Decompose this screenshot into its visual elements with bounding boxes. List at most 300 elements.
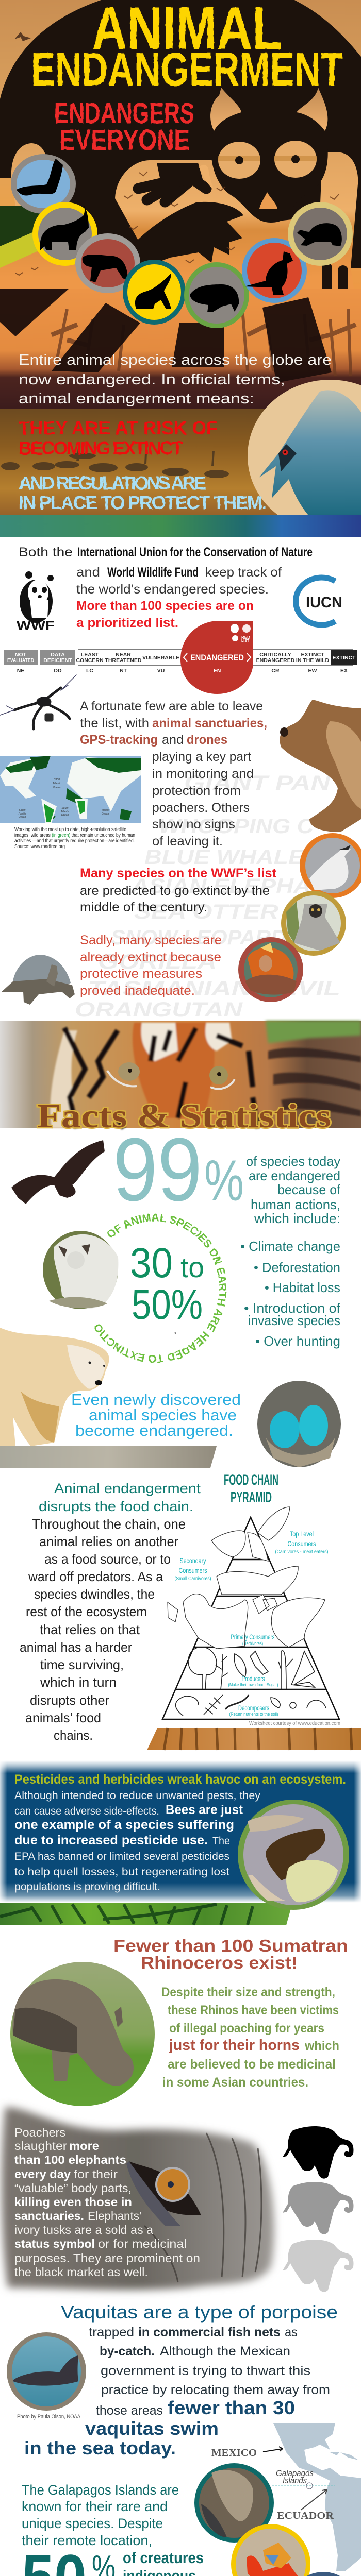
badge: rhino: [32, 202, 97, 266]
panel: statistics: x: [174, 1331, 176, 1335]
heading: food chain pyramid: [224, 1471, 278, 1506]
dark circle: [0, 0, 361, 268]
text: food chain body: [20, 1516, 186, 1743]
badge: boar: [184, 262, 249, 328]
label: Mexico: MEXICO: [211, 2447, 257, 2459]
pyramid labels: (Make their own food -Sugar): [228, 1682, 278, 1687]
swans: [1, 443, 229, 478]
photo: lemur badge: [281, 891, 346, 956]
panel: rhinoceros: [10, 1936, 348, 2106]
chart: red list scale: DD: [54, 668, 62, 674]
list: causes: invasive species: [248, 1313, 340, 1328]
map: wild areas: [0, 756, 141, 823]
panel: tree and water landscape: [0, 289, 361, 537]
arrow: to Mexico: [263, 2447, 283, 2452]
map: wild areas: Atlantic: [52, 782, 61, 785]
text: vaquitas body: Although the Mexican: [160, 2344, 290, 2359]
blue statement: AND REGULATIONS ARE: [19, 472, 206, 494]
text: fortunate few: drones: [187, 733, 227, 747]
text: food chain body: Throughout the chain, one: [32, 1516, 186, 1532]
chart: red list scale: ENDANGERED: [256, 657, 295, 664]
text: fortunate few: animal sanctuaries,: [152, 716, 267, 731]
text: elephant poaching: killing even those in: [14, 2195, 132, 2209]
text: galapagos intro: their remote location,: [22, 2533, 152, 2548]
text: sadly extinct: proved inadequate.: [80, 984, 195, 998]
circular label: OF ANIMAL SPECIES ON EARTH ARE HEADED TO EXTINCTION: [94, 1214, 227, 1363]
watermark species names: [75, 772, 345, 1021]
map caption: activities —and that urgently require protection—are identified.: [14, 838, 135, 844]
text: and WWF: World Wildlife Fund: [107, 565, 199, 580]
arrow: to Ecuador: [301, 2489, 327, 2510]
heading: food chain text: Animal endangerment: [54, 1481, 201, 1496]
text: vaquitas body: practice by relocating them away from: [101, 2383, 330, 2397]
heading: Vaquitas are a type of porpoise: [61, 2301, 338, 2323]
body text: Although intended to reduce unwanted pests, they: [14, 1790, 260, 1802]
text: and WWF: [76, 565, 282, 597]
pyramid labels: (Carnivores - meat eaters): [275, 1549, 328, 1555]
photo: tern badge: [300, 833, 361, 898]
chart: red list scale: EX: [340, 668, 348, 674]
watermark species names: ORANGUTAN: [75, 998, 243, 1021]
pyramid labels: (Small Carnivores): [174, 1576, 211, 1582]
text: galapagos intro: The Galapagos Islands are: [22, 2482, 179, 2498]
text: food chain body: species dwindles, the: [34, 1586, 155, 1602]
highlight: fewer than 30: fewer than 30: [168, 2397, 295, 2418]
text: newly discovered: become endangered.: [75, 1421, 233, 1439]
icon: WWF panda logo: WWF: [17, 619, 55, 633]
subtitle: [54, 97, 194, 157]
text: fortunate few: protection from: [152, 784, 241, 798]
eyes: [218, 142, 260, 179]
chart: red list scale: NE: [17, 668, 24, 674]
dark legs: [0, 289, 332, 383]
red highlight: [76, 599, 254, 630]
text: newly discovered: Even newly discovered: [71, 1391, 241, 1409]
text: and WWF: the world’s endangered species.: [76, 582, 269, 597]
fur strip: [0, 1446, 217, 1468]
stat: 30 to 50 percent: [130, 1240, 204, 1328]
text: elephant poaching: Elephants’: [88, 2209, 142, 2223]
head: [211, 111, 328, 223]
chart: red list scale: NT: [120, 668, 127, 674]
text: galapagos intro: [22, 2482, 179, 2548]
sunset band: [0, 289, 361, 410]
text: rhino description: [161, 1985, 339, 2090]
photo: arctic fox: [43, 1231, 118, 1309]
red statement: [19, 417, 218, 459]
map: wild areas: Ocean: [61, 814, 69, 817]
text: of creatures: [123, 2549, 213, 2576]
text: elephant poaching: [14, 2126, 200, 2279]
text: fortunate few: the list, with: [80, 716, 149, 731]
watermark species names: TASMANIAN DEVIL: [88, 977, 340, 1000]
feather strip: [0, 515, 361, 537]
text: human actions: [246, 1154, 341, 1226]
chart: red list scale: [4, 621, 357, 694]
pyramid frame: [162, 1517, 339, 1719]
photo credit: Photo by Paula Olson, NOAA: [17, 2414, 81, 2420]
badge: tiger: [75, 233, 140, 293]
text: rhino description: are believed to be medicinal: [168, 2057, 336, 2072]
pyramid labels: (Herbivores): [242, 1641, 263, 1646]
label: Galapagos Islands: Islands: [283, 2476, 307, 2485]
body text: can cause adverse side-effects.: [14, 1805, 159, 1817]
panel: pesticides: [0, 1760, 361, 1925]
text: human actions: because of: [277, 1182, 341, 1197]
text: vaquitas body: [89, 2325, 330, 2418]
text: food chain body: animals’ food: [25, 1710, 101, 1725]
chart: red list scale: THREATENED: [105, 657, 142, 664]
text: rhino description: just for their horns: [169, 2037, 300, 2054]
chart: red list scale: RED: [241, 635, 250, 640]
text: fortunate few: and: [162, 733, 184, 747]
photo: tamarin badge: [238, 937, 303, 1002]
map: Mexico and Ecuador: [211, 2423, 361, 2571]
red statement: BECOMING EXTINCT: [19, 437, 183, 459]
text: fortunate few: of leaving it.: [152, 834, 223, 849]
animal badges: [11, 154, 353, 328]
text: vaquitas body: as: [285, 2325, 298, 2340]
text: sadly extinct: already extinct because: [80, 950, 221, 964]
photo: vaquita badge: [7, 2332, 86, 2411]
chart: red list scale: EVALUATED: [7, 657, 34, 664]
intro text: Entire animal species across the globe are: [19, 352, 332, 368]
badge: kangaroo: [242, 238, 307, 303]
chart: red list scale: VU: [157, 668, 165, 674]
subtitle: EVERYONE: [59, 124, 190, 157]
body text: due to increased pesticide use.: [14, 1833, 208, 1848]
pyramid labels: Secondary: [179, 1556, 206, 1565]
intro text: [19, 352, 332, 407]
body text: EPA has banned or limited several pesticides: [14, 1851, 229, 1862]
body text: The: [212, 1835, 230, 1847]
icon: drone: [0, 675, 76, 729]
upper hand: [138, 178, 206, 202]
red highlight: a prioritized list.: [76, 616, 178, 630]
photo: bear: [280, 700, 361, 832]
text: galapagos intro: unique species. Despite: [22, 2516, 163, 2531]
heading: [113, 1936, 348, 1972]
text: and WWF: keep track of: [205, 565, 282, 580]
water: [0, 409, 361, 515]
text: newly discovered: [71, 1391, 241, 1439]
label: Galapagos Islands: [276, 2468, 314, 2485]
badge: wolf: [123, 260, 186, 325]
body text: Bees are just: [166, 1803, 243, 1817]
map: wild areas: North: [54, 778, 60, 781]
photo: elephant eye: [2, 2107, 274, 2290]
panel: galapagos: [22, 2463, 360, 2576]
watermark species names: BLUE WHALE: [144, 846, 305, 869]
text: food chain body: animal relies on another: [39, 1534, 178, 1549]
text: fortunate few: GPS-tracking: [80, 733, 158, 747]
stat: 99 percent: 99: [113, 1119, 202, 1219]
chart: red list scale: EN: [214, 668, 221, 674]
photo: vulture: [11, 1140, 105, 1204]
chart: red list scale: LIST: [241, 639, 250, 643]
text: WWF list: middle of the century.: [80, 900, 207, 914]
list: causes: • Over hunting: [255, 1333, 340, 1349]
text: sadly extinct: protective measures: [80, 967, 202, 981]
text: human actions: are endangered: [249, 1168, 340, 1183]
text: rhino description: of illegal poaching for years: [169, 2021, 324, 2036]
chart: red list scale: NEAR: [116, 652, 131, 658]
text: elephant poaching: ivory tusks are a sold as a: [14, 2223, 153, 2236]
text: human actions: which include:: [254, 1211, 340, 1226]
panel: who tracks species: [0, 545, 361, 1005]
lower hand and arm: [119, 202, 243, 273]
watermark species names: SNOW LEOPARD: [111, 926, 286, 949]
watermark species names: WHOOPING C: [159, 815, 314, 838]
text: vaquitas body: those areas: [96, 2403, 163, 2418]
text: fortunate few: playing a key part: [152, 750, 251, 764]
text: elephant poaching: slaughter: [14, 2139, 67, 2153]
sketches: producers: [188, 1647, 315, 1689]
watermark species names: GORILLA: [98, 951, 217, 973]
panel: statistics: [0, 1119, 341, 1468]
text: newly discovered: animal species have: [89, 1406, 237, 1424]
text: rhino description: Despite their size and strength,: [161, 1985, 335, 1999]
text: of creatures: of creatures: [123, 2549, 204, 2567]
map: wild areas: Indian: [102, 809, 109, 812]
body text: one example of a species suffering: [14, 1818, 234, 1832]
pyramid labels: (Return nutrients to the soil): [229, 1711, 278, 1717]
text: food chain body: as a food source, or to: [44, 1551, 171, 1567]
panel: hero header: [0, 0, 361, 335]
photo: polar bear: [0, 1328, 109, 1446]
text: WWF list: [80, 866, 277, 914]
map: wild areas: South: [19, 809, 26, 812]
chart: red list scale: EXTINCT: [301, 652, 324, 658]
highlight: fewer than 30: in the sea today.: [24, 2437, 176, 2459]
scale lines: [78, 650, 353, 665]
panel: vaquitas: [7, 2301, 361, 2571]
blue statement: [19, 472, 267, 513]
body text: [14, 1790, 260, 1893]
heading: food chain text: disrupts the food chain.: [39, 1499, 193, 1514]
text: elephant poaching: “valuable” body parts,: [14, 2181, 132, 2195]
text: vaquitas body: in commercial fish nets: [138, 2325, 281, 2340]
text: galapagos intro: known for their rare and: [22, 2499, 168, 2514]
text: food chain body: disrupts other: [30, 1692, 109, 1708]
photo: nest with eggs: [257, 1381, 341, 1467]
text: elephant poaching: or for medicinal: [98, 2237, 187, 2250]
photo: bee badge: [238, 1800, 349, 1910]
map: wild areas: Ocean: [53, 786, 61, 789]
badge: eagle: [11, 154, 76, 214]
photo: tiger face: [0, 1021, 361, 1128]
icon: IUCN logo: [296, 578, 342, 625]
body text: to help quell losses, but regenerating lost: [14, 1866, 229, 1878]
text: food chain body: animal has a harder: [20, 1639, 132, 1655]
stat: 30 to 50 percent: 50%: [132, 1281, 203, 1328]
chart: red list scale: VULNERABLE: [142, 655, 179, 661]
list: causes: • Climate change: [240, 1239, 340, 1254]
pyramid labels: Consumers: [178, 1566, 207, 1574]
text: sadly extinct: [80, 933, 222, 998]
pyramid labels: Consumers: [288, 1539, 316, 1548]
pyramid labels: Decomposers: [238, 1704, 269, 1712]
text: WWF list: are predicted to go extinct by the: [80, 884, 270, 898]
text: fortunate few: show no signs: [152, 817, 235, 832]
map caption: Source: www.roadfree.org: [14, 844, 65, 850]
photo: tortoise: [2, 955, 75, 1005]
pyramid labels: [174, 1530, 328, 1717]
text: elephant poaching: sanctuaries.: [14, 2209, 84, 2223]
circular label: [94, 1214, 227, 1363]
subtitle: ENDANGERS: [54, 97, 194, 130]
right arm fingers: [327, 268, 343, 315]
fern strip: [0, 1903, 292, 1925]
orange lower landscape: [0, 152, 361, 335]
green band: [0, 206, 57, 250]
chart: red list scale: CR: [271, 668, 280, 674]
text: food chain body: rest of the ecosystem: [26, 1604, 147, 1619]
chart: red list scale: CONCERN: [76, 657, 104, 664]
photo: rhino: [10, 1962, 155, 2106]
panel: tiger banner: [0, 1021, 361, 1135]
nose: [259, 192, 277, 209]
left peach shape: [11, 143, 57, 247]
text: elephant poaching: status symbol: [14, 2237, 95, 2250]
intro text: now endangered. In official terms,: [19, 371, 285, 388]
chart: red list scale: IN THE WILD: [296, 657, 329, 664]
text: rhino description: in some Asian countries.: [162, 2075, 308, 2090]
photo: penguin badge: [286, 2572, 360, 2576]
blue statement: IN PLACE TO PROTECT THEM.: [19, 492, 267, 513]
text: food chain body: time surviving,: [40, 1657, 124, 1672]
photo: crab badge: [231, 2524, 310, 2576]
map: wild areas: Pacific: [19, 812, 26, 816]
text: fortunate few: A fortunate few are able to leave: [80, 699, 263, 714]
text: elephant poaching: for their: [74, 2167, 118, 2181]
text: elephant poaching: than 100 elephants: [14, 2153, 126, 2166]
title: [31, 0, 343, 96]
ears: [210, 88, 327, 131]
photo: sea lion badge: [194, 2463, 274, 2543]
text: sadly extinct: Sadly, many species are: [80, 933, 222, 947]
watermark species names: ASIAN ELEPHANT: [131, 875, 345, 897]
icon: WWF panda logo: [17, 571, 55, 633]
list: causes: • Introduction of: [244, 1300, 341, 1316]
list: causes: • Habitat loss: [265, 1280, 340, 1295]
map caption: Working with the most up to date, high-resolution satellite: [14, 827, 126, 833]
red highlight: More than 100 species are on: [76, 599, 254, 613]
text: vaquitas body: government is trying to thwart this: [101, 2364, 310, 2378]
chart: red list scale: EW: [308, 668, 317, 674]
text: food chain body: which in turn: [40, 1674, 117, 1690]
chart: red list scale: LEAST: [81, 652, 99, 658]
chart: red list scale: CRITICALLY: [259, 652, 291, 658]
chart: red list scale: ENDANGERED: [190, 653, 244, 663]
text: human actions: of species today: [246, 1154, 340, 1169]
text: elephant poaching: Poachers: [14, 2126, 65, 2139]
heading: food chain text: [39, 1481, 201, 1514]
intro line: Both the: [19, 545, 73, 560]
panel: elephants: [2, 2107, 353, 2292]
icon: elephant silhouettes: [283, 2126, 353, 2292]
sky background: [0, 0, 361, 335]
text: elephant poaching: more: [69, 2139, 99, 2153]
map: wild areas: Ocean: [102, 812, 109, 816]
intro line: [19, 545, 313, 560]
pyramid labels: Top Level: [290, 1530, 314, 1538]
text: WWF list: Many species on the WWF’s list: [80, 866, 277, 880]
map caption: images, wild areas (in green) that remain untouched by human: [14, 833, 135, 838]
sketches: decomposers: [176, 1695, 326, 1716]
label: Ecuador: ECUADOR: [277, 2510, 334, 2521]
credit: Worksheet courtesy of www.education.com: [249, 1721, 340, 1726]
badge: tortoise: [288, 202, 353, 266]
intro text: animal endangerment means:: [19, 391, 254, 407]
stat: 99 percent: %: [204, 1148, 244, 1213]
text: elephant poaching: every day: [14, 2167, 71, 2181]
text: rhino description: these Rhinos have been victims: [168, 2003, 339, 2018]
map: wild areas: Ocean: [19, 816, 26, 819]
text: fortunate few: in monitoring and: [152, 767, 254, 781]
heading: food chain pyramid: PYRAMID: [231, 1489, 272, 1506]
body text: populations is proving difficult.: [14, 1881, 160, 1893]
heading: Rhinoceros exist!: [141, 1953, 298, 1972]
chart: red list scale: DEFICIENT: [43, 657, 72, 664]
map caption: [14, 827, 135, 850]
text: food chain body: ward off predators. As a: [28, 1569, 163, 1584]
chart: red list scale: DATA: [51, 652, 65, 658]
text: and WWF: and: [76, 565, 100, 580]
heading: food chain pyramid: FOOD CHAIN: [224, 1471, 278, 1488]
text: vaquitas body: by-catch.: [100, 2344, 155, 2359]
highlight: fewer than 30: [24, 2397, 295, 2459]
blue background: [0, 1760, 361, 1903]
text: elephant poaching: the black market as well.: [14, 2265, 148, 2279]
text: fortunate few: poachers. Others: [152, 801, 250, 815]
map: wild areas: South: [61, 807, 69, 810]
bird circle: [248, 380, 361, 515]
watermark species names: GIANT PAN: [184, 772, 331, 794]
pyramid labels: Primary Consumers: [231, 1633, 274, 1641]
text: rhino description: which: [304, 2039, 339, 2053]
heading: Pesticides and herbicides wreak havoc on an ecosystem.: [14, 1772, 346, 1787]
text: human actions: human actions,: [251, 1197, 340, 1212]
eyes: [118, 1062, 140, 1081]
stat: 30 to 50 percent: to: [180, 1251, 204, 1283]
tree silhouettes: [52, 309, 356, 376]
list: causes: • Deforestation: [254, 1260, 340, 1275]
panel: food chain: [20, 1471, 361, 1750]
text: vaquitas body: trapped: [89, 2325, 134, 2340]
watermark species names: SEA OTTER: [134, 901, 278, 923]
list: causes: [240, 1239, 341, 1349]
stat: 30 to 50 percent: 30: [130, 1240, 173, 1286]
chart: red list scale: NOT: [15, 652, 27, 658]
wood strip: [147, 1728, 361, 1750]
chart: food pyramid: [162, 1507, 340, 1726]
highlight: fewer than 30: vaquitas swim: [85, 2418, 219, 2439]
map: wild areas: Atlantic: [60, 810, 70, 814]
heading: Fewer than 100 Sumatran: [113, 1936, 348, 1955]
pyramid labels: Producers: [241, 1674, 265, 1683]
birds: [15, 172, 339, 275]
endangered marker: [180, 621, 253, 694]
icon: IUCN logo: IUCN: [306, 594, 342, 611]
lemur figure: [119, 88, 343, 315]
text: food chain body: that relies on that: [40, 1622, 140, 1637]
text: elephant poaching: purposes. They are prominent on: [14, 2251, 200, 2265]
chart: red list scale: LC: [86, 668, 93, 674]
chart: red list scale: EXTINCT: [333, 655, 356, 661]
red statement: THEY ARE AT RISK OF: [19, 417, 218, 438]
label: Galapagos Islands: Galapagos: [276, 2468, 314, 2478]
